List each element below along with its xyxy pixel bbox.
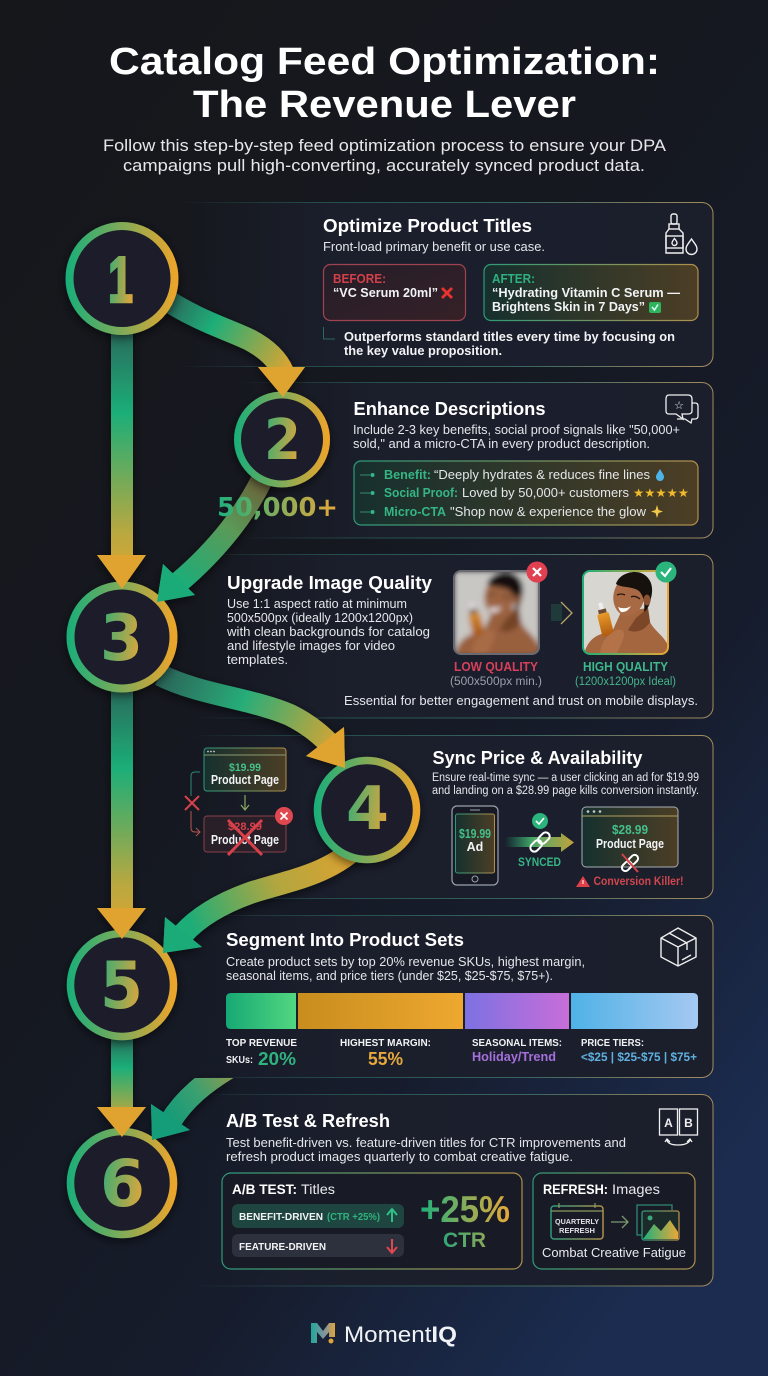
panel: optimize product titles [175, 202, 713, 366]
step 2 badge [238, 395, 326, 484]
label: high quality: (1200x1200px Ideal) [575, 676, 676, 688]
footer logo [311, 1322, 457, 1347]
subtitle [103, 136, 667, 175]
step 2 badge: 2 [264, 408, 301, 473]
label: high quality [575, 660, 676, 688]
row: benefit-driven: BENEFIT-DRIVEN [239, 1211, 323, 1223]
label: top revenue [226, 1037, 297, 1069]
diagram: broken price sync [185, 748, 293, 855]
text: outcome note: Outperforms standard titles every time by focusing on [344, 330, 675, 344]
icon: a/b swap: B [684, 1116, 693, 1130]
icon: a/b swap [660, 1109, 698, 1145]
arrow: to new images [611, 1216, 628, 1228]
panel: a/b test titles: Titles [301, 1181, 335, 1197]
text: step 4 description: Ensure real-time sync — a user clicking an ad for $19.99 [432, 772, 699, 784]
text: step 2 description [353, 423, 680, 451]
text: step 6 description: refresh product images quarterly to combat creative fatigue. [226, 1150, 573, 1164]
label: highest margin [340, 1037, 431, 1069]
window: mismatched product page [204, 807, 293, 855]
panel: a/b test and refresh [190, 1094, 713, 1286]
callout: example copy: Micro-CTA [384, 505, 446, 519]
label: price tiers [581, 1037, 697, 1064]
label: seasonal items: Holiday/Trend [472, 1050, 556, 1064]
arrowhead over badge: step 6 vertical [97, 1107, 146, 1137]
panel: refresh images: Combat Creative Fatigue [542, 1245, 686, 1260]
step 6 badge: 6 [100, 1147, 145, 1222]
warning: conversion killer: Conversion Killer! [594, 876, 684, 888]
heading: step 1: Optimize Product Titles [323, 215, 532, 236]
icon: synced link arrow: SYNCED [518, 857, 561, 869]
callout: example copy: Social Proof: [384, 486, 458, 500]
title: Catalog Feed Optimization: [109, 41, 660, 83]
label: top revenue: SKUs: [226, 1055, 253, 1066]
step 6 badge [70, 1132, 174, 1234]
label: top revenue: 20% [258, 1049, 296, 1069]
subtitle: campaigns pull high-converting, accurately synced product data. [123, 156, 645, 175]
arrowhead over badge: step 5 vertical [97, 908, 146, 939]
icon: quarterly calendar: REFRESH [559, 1226, 595, 1235]
subtitle: Follow this step-by-step feed optimization process to ensure your DPA [103, 136, 667, 155]
panel: upgrade image quality [190, 554, 713, 718]
label: low quality [450, 660, 542, 688]
text: step 1 description: Front-load primary benefit or use case. [323, 240, 545, 254]
text: step 3 description [226, 597, 430, 667]
icon: review chat bubbles [666, 395, 698, 423]
text: step 6 description [226, 1136, 626, 1164]
icon: image stack [637, 1205, 679, 1240]
callout: before: “VC Serum 20ml” [333, 286, 438, 300]
step 1 badge: 1 [108, 243, 133, 316]
label: highest margin: HIGHEST MARGIN: [340, 1037, 431, 1049]
text: step 4 description: and landing on a $28.99 page kills conversion instantly. [432, 785, 699, 797]
label: low quality: LOW QUALITY [454, 660, 539, 674]
window: mismatched product page: Product Page [211, 833, 279, 847]
label: price tiers: PRICE TIERS: [581, 1037, 644, 1049]
step 3 badge [70, 586, 174, 688]
icon: serum dropper bottle [666, 214, 697, 254]
step 3 badge: 3 [100, 602, 143, 676]
step 4 badge [318, 760, 416, 860]
icon: quarterly calendar: QUARTERLY [555, 1217, 599, 1226]
step 5 badge: 5 [100, 949, 143, 1024]
text: step 2 description: sold," and a micro-CTA in every product description. [353, 437, 650, 451]
callout: after [484, 264, 698, 320]
stat: +25% ctr [420, 1189, 510, 1252]
text: step 3 description: Use 1:1 aspect ratio at minimum [227, 597, 407, 611]
step 5 badge [70, 934, 174, 1036]
panel: a/b test titles: A/B TEST: [232, 1181, 297, 1197]
step 1 badge [70, 226, 174, 331]
icon: phone ad: $19.99 [459, 827, 491, 841]
callout: example copy: ★★★★★ [633, 486, 689, 500]
row: benefit-driven: (CTR +25%) [327, 1211, 380, 1223]
label: top revenue: TOP REVENUE [226, 1037, 297, 1049]
callout: before: BEFORE: [333, 272, 386, 286]
callout: example copy [354, 461, 698, 525]
heading: step 6: A/B Test & Refresh [226, 1110, 390, 1131]
label: seasonal items: SEASONAL ITEMS: [472, 1037, 562, 1049]
text: step 6 description: Test benefit-driven vs. feature-driven titles for CTR improvements and [226, 1136, 626, 1150]
icon: a/b swap: A [664, 1116, 673, 1130]
arrow: step 2 to step 3 [157, 466, 268, 602]
chart: segment bar [226, 993, 698, 1029]
callout: after: AFTER: [492, 272, 535, 286]
callout: example copy: “Deeply hydrates & reduces fine lines [434, 468, 650, 482]
stat: +25% ctr: +25% [420, 1189, 510, 1230]
panel: refresh images: REFRESH: [543, 1181, 608, 1197]
heading: step 4: Sync Price & Availability [432, 747, 643, 768]
panel: segment into product sets [190, 916, 713, 1078]
text: step 3 note: Essential for better engagement and trust on mobile displays. [344, 694, 698, 708]
text: outcome note [324, 327, 675, 358]
icon: phone ad [452, 806, 498, 885]
arrowhead over badge: step 3 diagonal [157, 564, 195, 602]
label: price tiers: <$25 | $25-$75 | $75+ [581, 1052, 697, 1064]
arrow: step 5 to step 6 [150, 1078, 234, 1142]
stat: +25% ctr: CTR [443, 1229, 486, 1252]
window: correct product page: Product Page [211, 773, 279, 787]
label: highest margin: 55% [368, 1049, 403, 1069]
image: high quality portrait [583, 562, 676, 656]
stat: 50,000+: 50,000+ [217, 493, 338, 523]
arrow: down to mismatched page [241, 795, 249, 810]
callout: example copy: "Shop now & experience the glow [450, 505, 647, 519]
panel: refresh images: Images [612, 1181, 660, 1197]
text: step 3 description: and lifestyle images for video [227, 639, 395, 653]
callout: example copy: Loved by 50,000+ customers [462, 486, 629, 500]
panel: sync price and availability [190, 736, 713, 898]
arrow: step 3 to step 5 [97, 688, 146, 939]
title: The Revenue Lever [193, 84, 576, 126]
panel: refresh images [533, 1173, 695, 1269]
window: correct product page: $19.99 [229, 762, 261, 774]
text: step 4 description [432, 772, 699, 797]
connector: failed sync [185, 772, 200, 836]
arrowheads over badges: step 2 [258, 367, 305, 397]
callout: after: “Hydrating Vitamin C Serum — [492, 286, 680, 300]
text: step 2 description: Include 2-3 key benefits, social proof signals like "50,000+ [353, 423, 680, 437]
label: high quality: HIGH QUALITY [583, 660, 669, 674]
callout: after: Brightens Skin in 7 Days” [492, 300, 645, 314]
label: low quality: (500x500px min.) [450, 676, 542, 688]
window: correct product page [204, 748, 286, 791]
icon: phone ad: Ad [467, 840, 483, 854]
wordmark: Moment IQ [344, 1322, 457, 1347]
text: step 3 description: with clean backgrounds for catalog [226, 625, 430, 639]
icon: product box [661, 928, 696, 966]
panel: a/b test titles [222, 1173, 522, 1269]
icon: product page browser: $28.99 [612, 823, 648, 837]
icon: quarterly calendar [551, 1203, 603, 1239]
callout: before [324, 264, 466, 320]
text: step 5 description: seasonal items, and price tiers (under $25, $25-$75, $75+). [226, 969, 553, 983]
text: step 5 description [226, 955, 585, 983]
heading: step 5: Segment Into Product Sets [226, 929, 464, 950]
icon: momentiq mark [311, 1323, 335, 1344]
arrowhead over badge: step 4 [306, 727, 345, 768]
arrowhead over badge: step 3 vertical [97, 555, 146, 589]
arrow: step 3 to step 4 [160, 675, 345, 768]
heading: step 2: Enhance Descriptions [354, 398, 546, 419]
heading: step 3: Upgrade Image Quality [227, 572, 433, 593]
text: step 5 description: Create product sets by top 20% revenue SKUs, highest margin, [226, 955, 585, 969]
text: outcome note: the key value proposition. [344, 344, 502, 358]
title [109, 41, 660, 126]
arrow: step 1 to step 3 [97, 330, 146, 589]
arrow: low to high quality [551, 602, 572, 624]
arrow: step 5 to step 6 [97, 1035, 146, 1137]
panel: enhance descriptions [235, 382, 713, 538]
text: step 3 description: 500x500px (ideally 1200x1200px) [227, 611, 413, 625]
icon: synced link arrow [505, 813, 574, 869]
callout: example copy: Benefit: [384, 468, 431, 482]
icon: review chat bubbles: ☆ [674, 399, 684, 412]
row: feature-driven [232, 1234, 404, 1257]
image: low quality portrait [454, 562, 548, 656]
arrowhead over badge: step 5 diagonal [163, 917, 202, 953]
text: step 3 description: templates. [227, 653, 288, 667]
icon: product page browser [582, 807, 678, 873]
window: mismatched product page: $28.99 [228, 821, 262, 833]
row: feature-driven: FEATURE-DRIVEN [239, 1241, 326, 1253]
row: benefit-driven [232, 1204, 404, 1228]
arrow: step 4 to step 5 [163, 842, 362, 953]
arrow: step 1 to step 2 [160, 296, 305, 397]
arrowhead over badge: step 6 diagonal [151, 1104, 190, 1140]
step 4 badge: 4 [346, 774, 389, 844]
icon: product page browser: Product Page [596, 837, 664, 851]
label: seasonal items [472, 1037, 562, 1064]
